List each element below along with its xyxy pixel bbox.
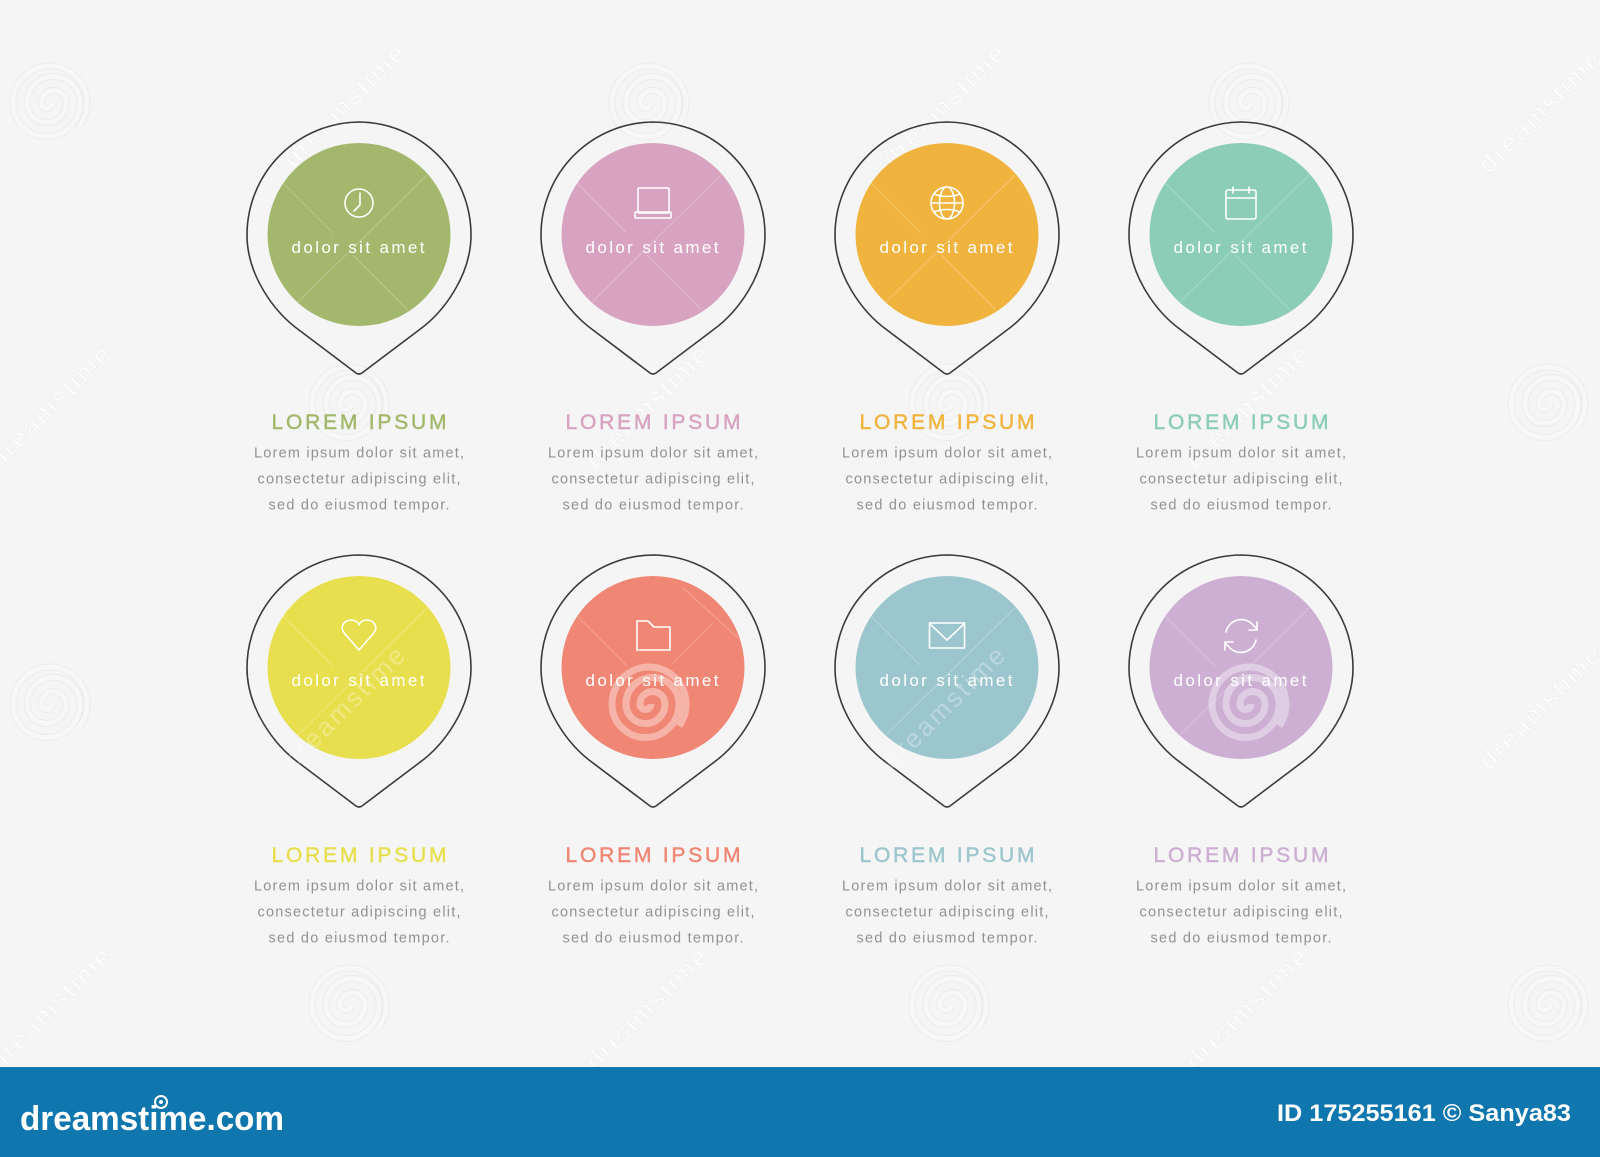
circle label: dolor sit amet: [586, 671, 719, 690]
body text: [254, 878, 464, 946]
watermark: background diagonal text: dreamstime: [876, 38, 1011, 173]
body text: consectetur adipiscing elit,: [1140, 472, 1342, 488]
heading: LOREM IPSUM: [566, 844, 740, 867]
body text: consectetur adipiscing elit,: [258, 472, 460, 488]
body text: Lorem ipsum dolor sit amet,: [548, 446, 758, 462]
icon: clock: [345, 189, 373, 217]
card: blue mail: [835, 555, 1059, 946]
body text: [1136, 878, 1346, 946]
watermark: overlay spirals and text: dreamstime: [876, 640, 1011, 775]
icon: laptop: [635, 188, 671, 218]
heading: LOREM IPSUM: [1154, 844, 1328, 867]
body text: [548, 878, 758, 946]
circle label: dolor sit amet: [586, 238, 719, 257]
body text: Lorem ipsum dolor sit amet,: [548, 878, 758, 894]
heading: LOREM IPSUM: [860, 844, 1034, 867]
circle label: dolor sit amet: [1174, 671, 1307, 690]
body text: consectetur adipiscing elit,: [846, 904, 1048, 920]
circle label: dolor sit amet: [880, 671, 1013, 690]
body text: [1136, 446, 1346, 514]
footer bar: [0, 1067, 1600, 1157]
icon: heart: [342, 620, 376, 650]
body text: Lorem ipsum dolor sit amet,: [842, 878, 1052, 894]
body text: sed do eiusmod tempor.: [856, 930, 1038, 946]
body text: Lorem ipsum dolor sit amet,: [1136, 878, 1346, 894]
body text: Lorem ipsum dolor sit amet,: [254, 878, 464, 894]
circle label: dolor sit amet: [292, 671, 425, 690]
body text: Lorem ipsum dolor sit amet,: [842, 446, 1052, 462]
body text: sed do eiusmod tempor.: [1150, 498, 1332, 514]
card: teal calendar: [1129, 122, 1353, 514]
card: coral folder: [541, 555, 765, 946]
card: orange globe: [835, 122, 1059, 514]
body text: sed do eiusmod tempor.: [268, 498, 450, 514]
body text: sed do eiusmod tempor.: [562, 498, 744, 514]
circle label: dolor sit amet: [1174, 238, 1307, 257]
card: yellow heart: [247, 555, 471, 946]
watermark: background diagonal text: dreamstime: [579, 941, 714, 1076]
watermark: background diagonal text: dreamstime: [1179, 339, 1314, 474]
heading: LOREM IPSUM: [1154, 411, 1328, 434]
watermark: overlay spirals and text: [276, 640, 1286, 775]
icon: calendar: [1226, 187, 1256, 219]
body text: consectetur adipiscing elit,: [552, 472, 754, 488]
body text: Lorem ipsum dolor sit amet,: [1136, 446, 1346, 462]
body text: sed do eiusmod tempor.: [1150, 930, 1332, 946]
heading: LOREM IPSUM: [860, 411, 1034, 434]
body text: consectetur adipiscing elit,: [846, 472, 1048, 488]
card: purple refresh: [1129, 555, 1353, 946]
body text: [254, 446, 464, 514]
body text: consectetur adipiscing elit,: [1140, 904, 1342, 920]
body text: [842, 446, 1052, 514]
body text: sed do eiusmod tempor.: [856, 498, 1038, 514]
body text: [842, 878, 1052, 946]
circle label: dolor sit amet: [292, 238, 425, 257]
watermark: overlay spirals and text: dreamstime: [276, 640, 411, 775]
watermark: background diagonal text: dreamstime: [579, 339, 714, 474]
icon: refresh arrows: [1225, 620, 1257, 652]
body text: sed do eiusmod tempor.: [562, 930, 744, 946]
icon: globe: [931, 187, 963, 219]
card: green clock: [247, 122, 471, 514]
body text: sed do eiusmod tempor.: [268, 930, 450, 946]
icon: envelope: [930, 623, 964, 648]
heading: LOREM IPSUM: [566, 411, 740, 434]
icon: folder: [637, 621, 670, 650]
body text: Lorem ipsum dolor sit amet,: [254, 446, 464, 462]
card: pink laptop: [541, 122, 765, 514]
watermark: background diagonal text: dreamstime: [276, 38, 411, 173]
circle label: dolor sit amet: [880, 238, 1013, 257]
body text: consectetur adipiscing elit,: [552, 904, 754, 920]
body text: consectetur adipiscing elit,: [258, 904, 460, 920]
body text: [548, 446, 758, 514]
footer credit: ID 175255161 © Sanya83: [1277, 1100, 1571, 1127]
watermark: background diagonal text: dreamstime: [1179, 941, 1314, 1076]
heading: LOREM IPSUM: [272, 844, 446, 867]
heading: LOREM IPSUM: [272, 411, 446, 434]
footer logo: dreamstime.com: [20, 1100, 284, 1138]
